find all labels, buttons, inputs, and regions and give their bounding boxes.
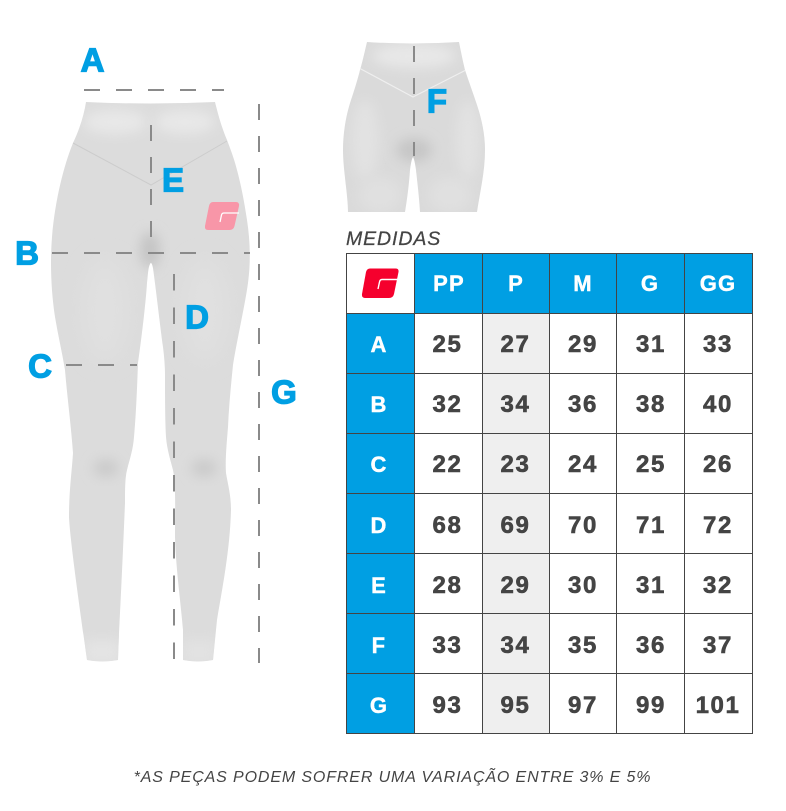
measure line E — [150, 125, 152, 253]
row E: 28 — [433, 572, 462, 599]
label G: G — [271, 374, 297, 410]
row F: 33 — [433, 632, 462, 659]
row G: 93 — [433, 692, 462, 719]
row E: 29 — [501, 572, 530, 599]
row C: C — [370, 452, 388, 477]
measure line A — [84, 89, 224, 91]
size headers: GG — [700, 271, 736, 296]
measure line D — [173, 274, 175, 660]
row A: A — [370, 332, 388, 357]
footnote: *AS PEÇAS PODEM SOFRER UMA VARIAÇÃO ENTRE 3% E 5% — [134, 767, 651, 786]
row B: 32 — [433, 391, 462, 418]
row A: 27 — [501, 331, 530, 358]
blue row header column — [347, 313, 414, 733]
measure line C — [66, 364, 137, 366]
row B — [370, 391, 733, 418]
size headers — [433, 271, 736, 296]
row B: 34 — [501, 391, 530, 418]
label F: F — [427, 82, 447, 120]
row B: 40 — [703, 391, 733, 418]
size headers: P — [508, 271, 524, 296]
row G: 97 — [568, 692, 598, 719]
row E: 32 — [703, 572, 733, 599]
row B: B — [370, 392, 388, 417]
row F: 36 — [636, 632, 666, 659]
row D: 70 — [568, 512, 598, 539]
row G — [370, 692, 740, 719]
row C: 25 — [636, 451, 666, 478]
blue header row — [414, 254, 752, 313]
row E: 30 — [568, 572, 598, 599]
measure line F — [413, 46, 415, 156]
label E: E — [162, 162, 184, 198]
row A — [370, 331, 733, 358]
row E: 31 — [636, 572, 666, 599]
size headers: PP — [433, 271, 465, 296]
row C: 22 — [433, 451, 462, 478]
row F — [372, 632, 733, 659]
row C — [370, 451, 733, 478]
row G: 101 — [696, 692, 740, 719]
row B: 38 — [636, 391, 666, 418]
measure line B — [52, 252, 250, 254]
size headers: M — [573, 271, 593, 296]
row A: 31 — [636, 331, 666, 358]
row B: 36 — [568, 391, 598, 418]
row G: 95 — [501, 692, 530, 719]
leggings front view — [51, 102, 250, 662]
row F: 37 — [703, 632, 733, 659]
label B: B — [15, 234, 39, 272]
row D: 68 — [433, 512, 462, 539]
label C: C — [28, 348, 52, 384]
row E — [371, 572, 733, 599]
row E: E — [371, 573, 387, 598]
heading: medidas: MEDIDAS — [346, 228, 441, 250]
row F: F — [372, 633, 386, 658]
measure line G — [258, 104, 260, 663]
label A: A — [81, 42, 104, 78]
row A: 29 — [568, 331, 598, 358]
row G: 99 — [636, 692, 666, 719]
icon: red brand logo — [362, 268, 399, 298]
leggings back view — [343, 42, 485, 212]
row D: D — [370, 513, 388, 538]
row G: G — [370, 693, 388, 718]
row F: 34 — [501, 632, 530, 659]
row D: 69 — [501, 512, 530, 539]
row D — [370, 512, 733, 539]
row A: 25 — [433, 331, 462, 358]
row D: 72 — [703, 512, 733, 539]
size table — [346, 254, 752, 734]
row F: 35 — [568, 632, 598, 659]
size headers: G — [641, 271, 659, 296]
row D: 71 — [636, 512, 666, 539]
table grid — [346, 254, 752, 734]
row C: 24 — [568, 451, 598, 478]
row C: 26 — [703, 451, 733, 478]
label D: D — [185, 298, 209, 336]
row C: 23 — [501, 451, 530, 478]
row A: 33 — [703, 331, 733, 358]
icon: pink brand logo on leggings — [205, 202, 239, 230]
highlighted column P — [482, 314, 549, 733]
